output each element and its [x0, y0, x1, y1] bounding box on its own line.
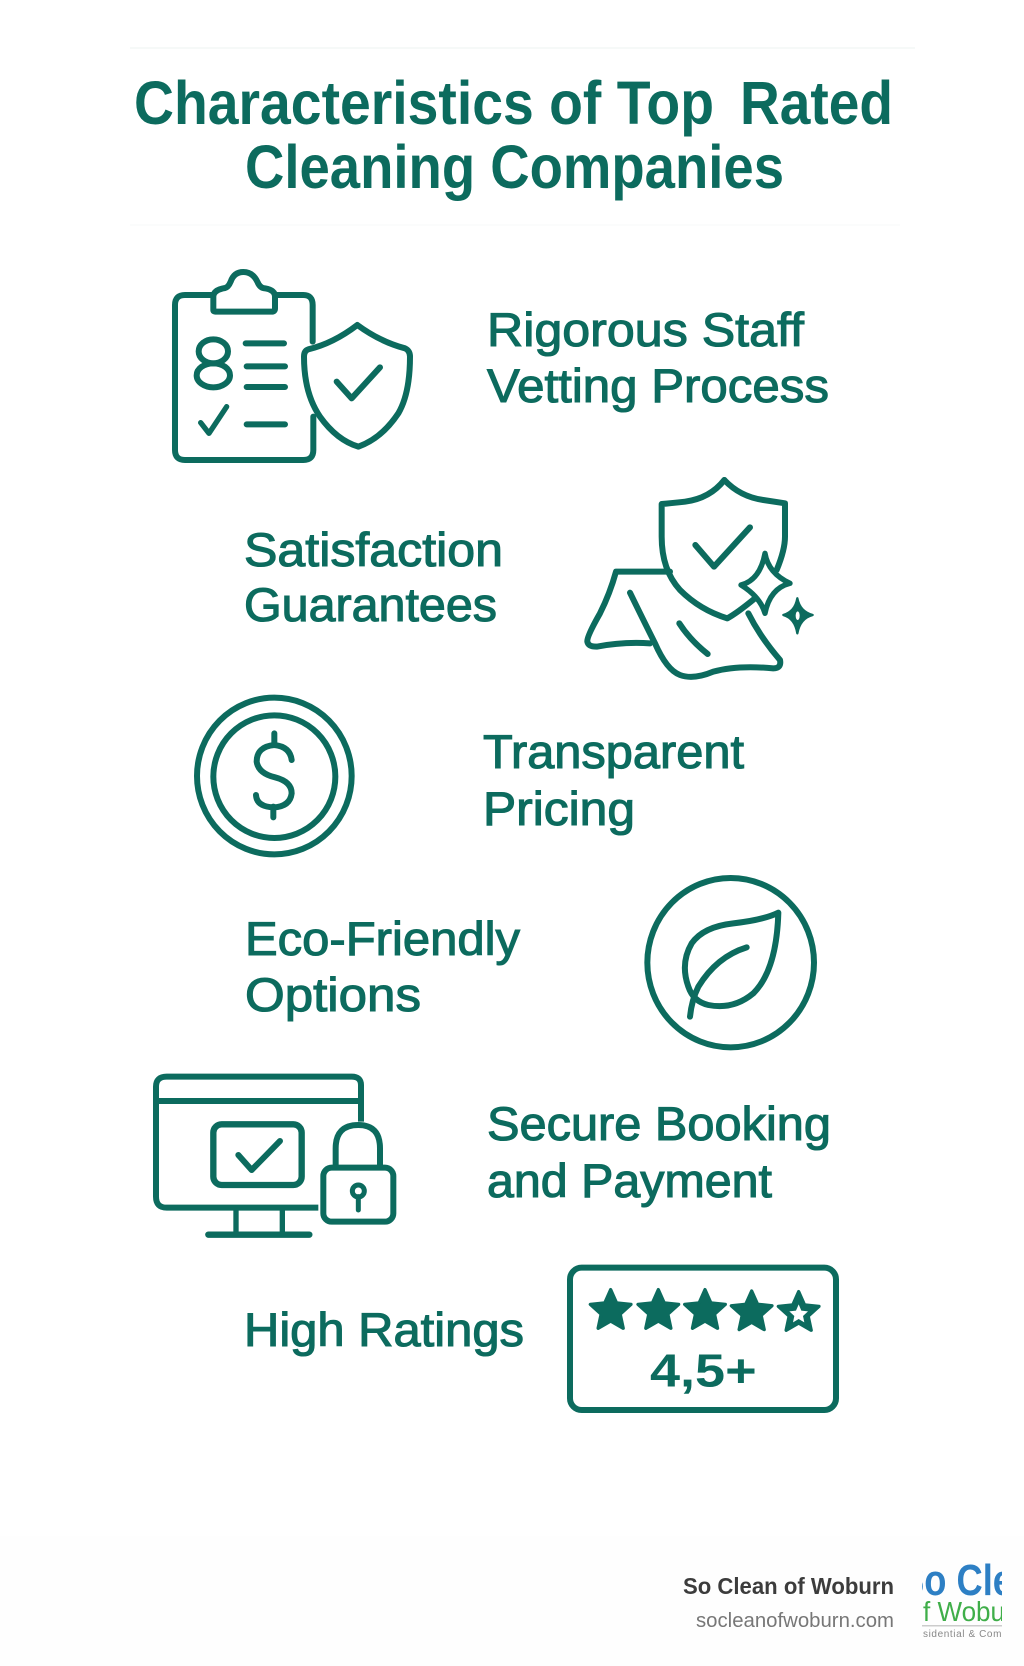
label: rigorous staff vetting process: Vetting Process: [487, 359, 829, 412]
label: satisfaction guarantees: Satisfaction: [244, 523, 503, 576]
label: satisfaction guarantees: [244, 523, 503, 631]
footer band: [0, 1536, 1024, 1666]
label: transparent pricing: [483, 725, 744, 835]
icon: clipboard with shield: [175, 272, 410, 460]
title: Cleaning Companies: [245, 133, 784, 201]
label: eco-friendly options: Options: [245, 968, 421, 1021]
label: rigorous staff vetting process: Rigorous Staff: [487, 303, 805, 356]
logo, cropped: [922, 1564, 1002, 1637]
label: secure booking and payment: [487, 1097, 831, 1207]
title: Characteristics of Top: [134, 69, 714, 137]
icon: star rating: [590, 1290, 819, 1330]
title: Rated: [740, 69, 893, 137]
icon: dollar coin: [197, 698, 352, 854]
footer website: socleanofwoburn.com: [696, 1610, 894, 1632]
icon: leaf in circle: [647, 878, 814, 1047]
footer company name: So Clean of Woburn: [683, 1573, 894, 1599]
label: secure booking and payment: Secure Booking: [487, 1097, 831, 1150]
label: eco-friendly options: Eco-Friendly: [245, 912, 521, 965]
icon: monitor with padlock: [156, 1077, 393, 1235]
label: secure booking and payment: and Payment: [487, 1154, 772, 1207]
label: eco-friendly options: [245, 912, 521, 1021]
icon: shield with cloth and sparkles: [587, 480, 813, 677]
title: [134, 69, 893, 201]
panel: title card: [130, 48, 915, 225]
label: transparent pricing: Transparent: [483, 725, 744, 778]
logo, cropped: f Wobu: [923, 1596, 1005, 1627]
label: high ratings: High Ratings: [244, 1303, 524, 1356]
rating value: 4,5+: [650, 1345, 757, 1397]
label: transparent pricing: Pricing: [483, 782, 635, 835]
label: satisfaction guarantees: Guarantees: [244, 578, 497, 631]
label: rigorous staff vetting process: [487, 303, 829, 412]
panel: rating badge: [570, 1268, 836, 1410]
